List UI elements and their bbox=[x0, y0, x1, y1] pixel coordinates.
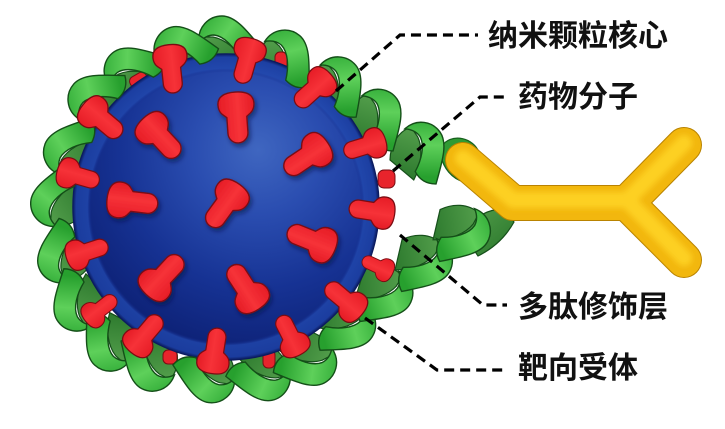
hidden drug molecules behind the sphere bbox=[128, 52, 287, 368]
label: drug molecule: 药物分子 bbox=[518, 81, 638, 114]
label: polypeptide coating: 多肽修饰层 bbox=[518, 291, 668, 324]
ribbon back strands bbox=[51, 37, 514, 385]
red drug molecules on the sphere surface bbox=[105, 91, 342, 319]
leader line: nanoparticle core bbox=[336, 35, 478, 91]
yellow targeting receptor bbox=[463, 143, 684, 260]
ribbon front strands: polypeptide coating bbox=[27, 16, 498, 409]
label: targeting receptor: 靶向受体 bbox=[518, 352, 638, 385]
leader line: drug molecule bbox=[393, 97, 507, 171]
label: nanoparticle core: 纳米颗粒核心 bbox=[488, 20, 668, 53]
leader line: targeting receptor bbox=[365, 318, 506, 370]
red drug molecules around the rim bbox=[53, 34, 398, 376]
nanoparticle core sphere bbox=[73, 54, 379, 360]
leader line: polypeptide coating bbox=[400, 235, 507, 305]
